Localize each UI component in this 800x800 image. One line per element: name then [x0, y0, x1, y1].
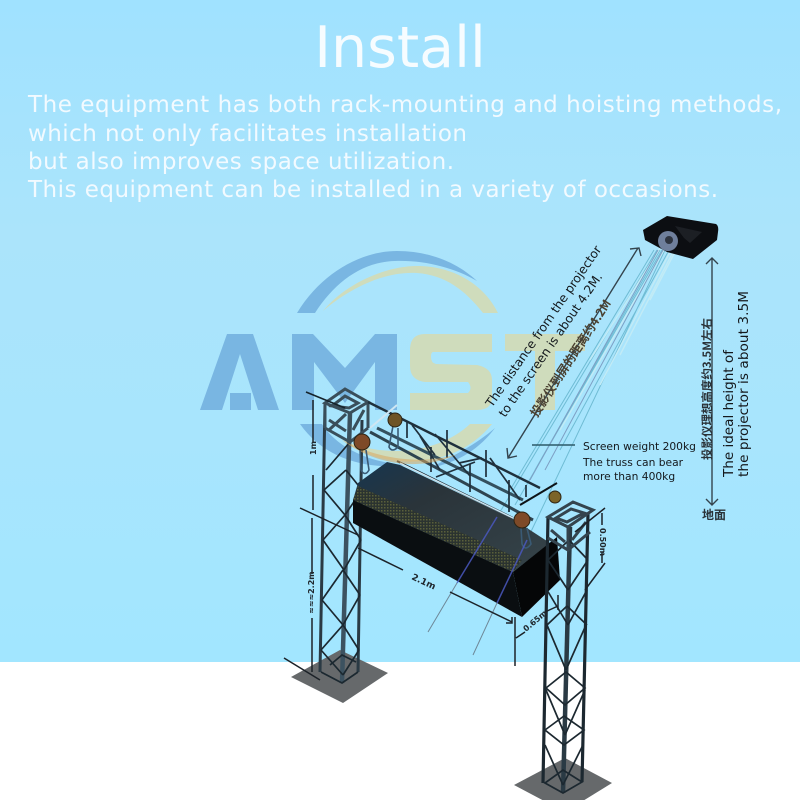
screen front face [353, 500, 522, 617]
label: 0.65m: 0.65m [522, 609, 549, 634]
Chinese label: distance: 投影仪到屏的距离约4.2M [526, 296, 615, 420]
annotation: projector height: The ideal height of [721, 349, 737, 478]
screen top face [353, 462, 550, 572]
dimension lines [284, 400, 605, 680]
logo arc: tan [323, 266, 498, 313]
projection beams [497, 248, 676, 540]
dimension: 1m height [312, 400, 314, 510]
truss web members [407, 422, 526, 512]
logo overlay on truss [342, 440, 458, 464]
label: 1m: 1m [309, 441, 318, 455]
screen side face [513, 537, 560, 617]
description text block: The equipment has both rack-mounting and hoisting methods, [27, 92, 782, 118]
logo letter A [200, 334, 279, 410]
truss pole and bars [306, 392, 345, 408]
logo letter M [292, 334, 397, 410]
left bracing [321, 442, 362, 683]
screen rail highlight [400, 463, 513, 518]
LED screen [353, 462, 560, 617]
pulley: right front [514, 512, 530, 528]
dimension: 0.50m [575, 508, 605, 590]
logo lower swoosh: blue [300, 424, 495, 468]
dimension: 0.65m [515, 595, 558, 666]
chain loops [360, 426, 531, 548]
arrow: projector height [706, 258, 718, 505]
logo letter T [505, 334, 585, 410]
callout: weight: Screen weight 200kg [583, 440, 696, 453]
dimension labels [307, 441, 607, 634]
description text block: but also improves space utilization. [28, 149, 454, 175]
logo lower swoosh: tan [342, 424, 492, 462]
annotation: projector height: the projector is about 3.5M [736, 291, 752, 477]
truss rails [368, 402, 540, 488]
label: 2.1m: 2.1m [410, 573, 437, 592]
right top box [548, 502, 593, 550]
projector lens [658, 231, 678, 251]
description text block: This equipment can be installed in a variety of occasions. [27, 177, 718, 203]
callout: weight: more than 400kg [583, 470, 675, 483]
description text block: which not only facilitates installation [28, 121, 467, 147]
label: 0.50m: 0.50m [598, 528, 607, 556]
truss beam [306, 392, 557, 520]
arrow: projector to screen distance [507, 248, 641, 458]
pulley: left front [354, 434, 370, 450]
projector body [643, 216, 718, 259]
right base plate [514, 758, 612, 800]
blue beam overlay lines [428, 517, 527, 655]
pulley: right rear [549, 491, 561, 503]
description text block [27, 92, 782, 203]
screen mesh band [353, 486, 522, 572]
projector [643, 216, 718, 259]
right tower [514, 502, 612, 800]
right bracing [545, 540, 588, 793]
Chinese label: ground: 地面 [702, 506, 726, 523]
title: Install [314, 15, 486, 81]
left top box [325, 389, 368, 442]
Chinese label: height: 投影仪理想高度约3.5M左右 [699, 318, 715, 460]
left base plate [291, 650, 388, 703]
annotation: projector height [721, 291, 752, 478]
left legs [320, 403, 362, 672]
dimension: 2.1m width [358, 548, 512, 623]
annotation: projector distance: to the screen is about 4.2M. [496, 270, 605, 420]
left tower [291, 389, 388, 703]
logo arc: blue [297, 251, 477, 313]
logo letter S [410, 334, 492, 410]
projector top detail [675, 226, 702, 243]
right legs [543, 513, 588, 783]
annotation: projector distance: The distance from the projector [482, 242, 605, 411]
watermark logo: AMST [200, 251, 585, 468]
hoist chains and pulleys [354, 413, 561, 548]
callout: weight [532, 440, 696, 483]
label: 2.2m: ≈≈≈2.2m [307, 571, 316, 614]
callout: weight: The truss can bear [582, 456, 684, 469]
pulley: left rear [388, 413, 402, 427]
dimension: 2.2m height [284, 508, 358, 680]
callout leader [532, 444, 575, 446]
